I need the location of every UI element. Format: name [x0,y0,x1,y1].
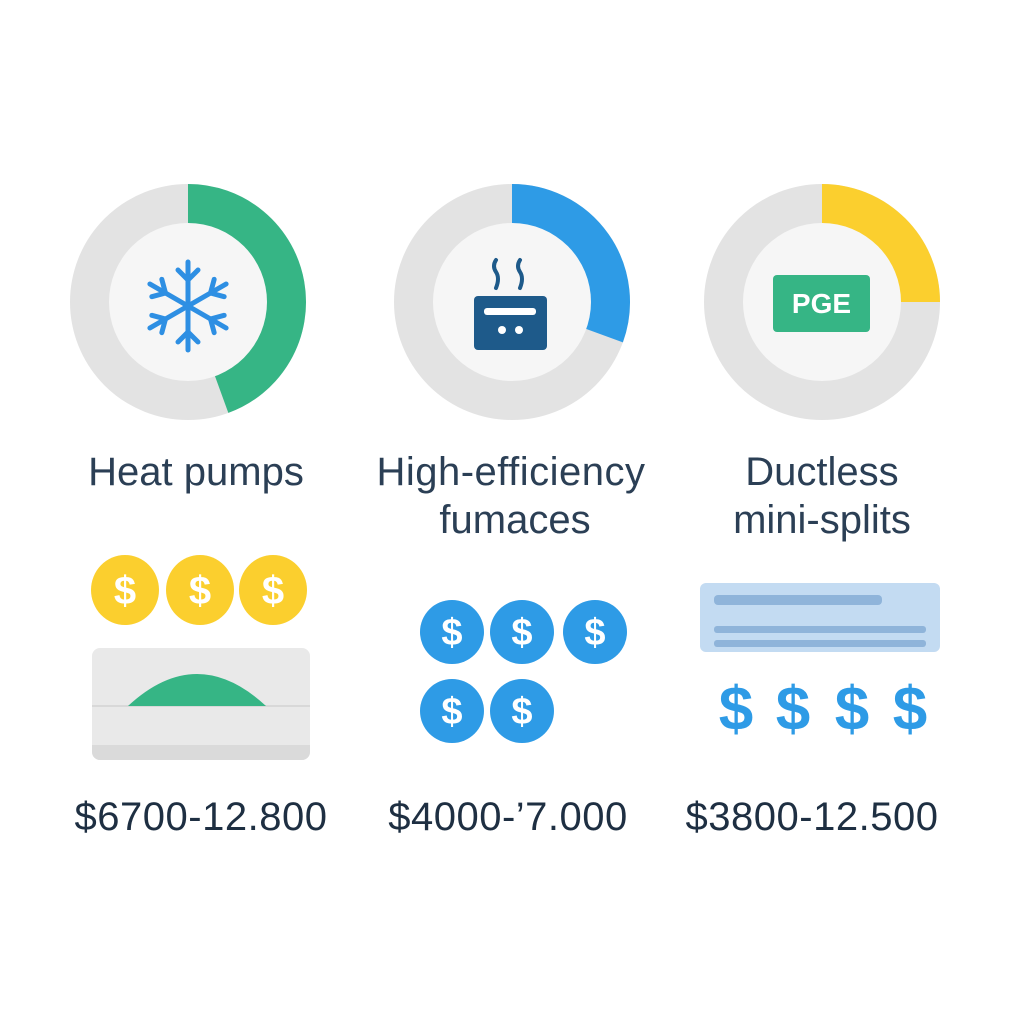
price: furnaces: $4000-’7.000 [388,795,628,839]
icon: heat pump unit [92,648,310,760]
icon: blue coins: $ [441,691,463,733]
icon: yellow coins [91,555,307,625]
icon: dollar signs: $ [893,675,927,744]
price: heat pumps: $6700-12.800 [75,795,327,839]
price: ductless: $3800-12.500 [686,795,938,839]
icon: dollar signs: $ [835,675,869,744]
heading: furnaces: High-efficiency [376,450,646,494]
heading: ductless: Ductless [745,450,899,494]
heading: furnaces [376,450,646,542]
panel: furnace donut [414,204,610,400]
icon: blue coins [420,600,627,743]
icon: yellow coins: $ [262,569,284,613]
heading: ductless [733,450,911,542]
icon: blue coins: $ [584,612,606,654]
icon: yellow coins: $ [189,569,211,613]
icon: yellow coins: $ [114,569,136,613]
icon: PGE badge: PGE [792,288,851,319]
heading: furnaces: fumaces [439,498,591,542]
icon: mini-split unit [700,583,940,652]
panel: heat pumps donut [90,204,286,400]
heading: heat pumps: Heat pumps [88,450,304,494]
icon: blue coins: $ [441,612,463,654]
icon: dollar signs [719,675,927,744]
icon: dollar signs: $ [776,675,810,744]
heading: ductless: mini-splits [733,498,911,542]
icon: dollar signs: $ [719,675,753,744]
icon: blue coins: $ [511,612,533,654]
icon: blue coins: $ [511,691,533,733]
icon: PGE badge [773,275,870,332]
icon: snowflake [145,262,231,350]
panel: ductless donut [724,204,920,400]
icon: furnace [474,260,547,350]
